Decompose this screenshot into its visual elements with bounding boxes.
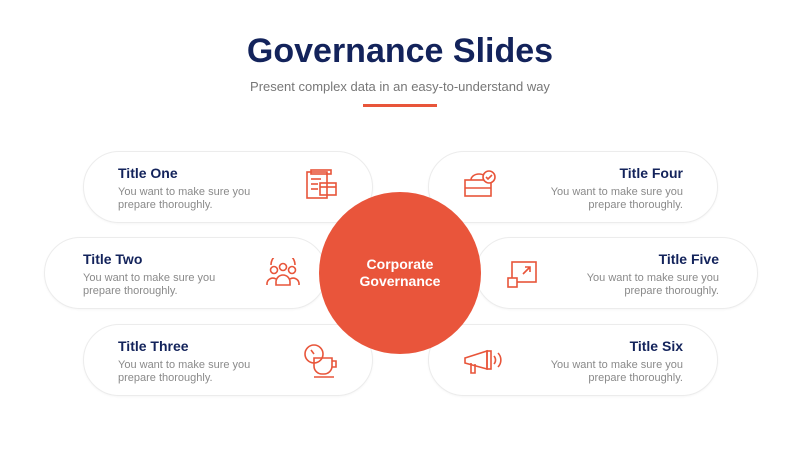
center circle: Corporate bbox=[367, 256, 433, 272]
panel: title one bbox=[83, 151, 373, 223]
icon: megaphone bbox=[464, 350, 502, 374]
subtitle: Present complex data in an easy-to-understand way bbox=[250, 79, 550, 94]
panel: title five bbox=[475, 237, 758, 309]
panel: title three bbox=[83, 324, 373, 396]
panel: title four: prepare thoroughly. bbox=[588, 199, 683, 211]
panel: title five: Title Five bbox=[659, 251, 719, 267]
icon: expand bbox=[507, 261, 537, 288]
panel: title three: You want to make sure you bbox=[118, 359, 250, 371]
panel: title four: You want to make sure you bbox=[551, 186, 683, 198]
panel: title six: Title Six bbox=[630, 338, 683, 354]
panel: title two bbox=[44, 237, 327, 309]
panel: title two: prepare thoroughly. bbox=[83, 285, 178, 297]
panel: title five: prepare thoroughly. bbox=[624, 285, 719, 297]
panel: title six bbox=[428, 324, 718, 396]
panel: title one: prepare thoroughly. bbox=[118, 199, 213, 211]
panel: title six: You want to make sure you bbox=[551, 359, 683, 371]
icon: box with check bbox=[464, 170, 496, 197]
icon: coffee clock bbox=[304, 344, 337, 378]
panel: title four: Title Four bbox=[619, 165, 683, 181]
center circle bbox=[319, 192, 481, 354]
panel: title six: prepare thoroughly. bbox=[588, 372, 683, 384]
panel: title two: You want to make sure you bbox=[83, 272, 215, 284]
accent line bbox=[363, 104, 437, 107]
panel: title three: Title Three bbox=[118, 338, 189, 354]
panel: title two: Title Two bbox=[83, 251, 142, 267]
panel: title three: prepare thoroughly. bbox=[118, 372, 213, 384]
panel: title five: You want to make sure you bbox=[587, 272, 719, 284]
icon: documents bbox=[306, 169, 337, 199]
title: Governance Slides bbox=[247, 32, 553, 70]
panel: title one: Title One bbox=[118, 165, 178, 181]
icon: team bbox=[266, 258, 300, 286]
center circle: Governance bbox=[360, 273, 440, 289]
panel: title four bbox=[428, 151, 718, 223]
panel: title one: You want to make sure you bbox=[118, 186, 250, 198]
